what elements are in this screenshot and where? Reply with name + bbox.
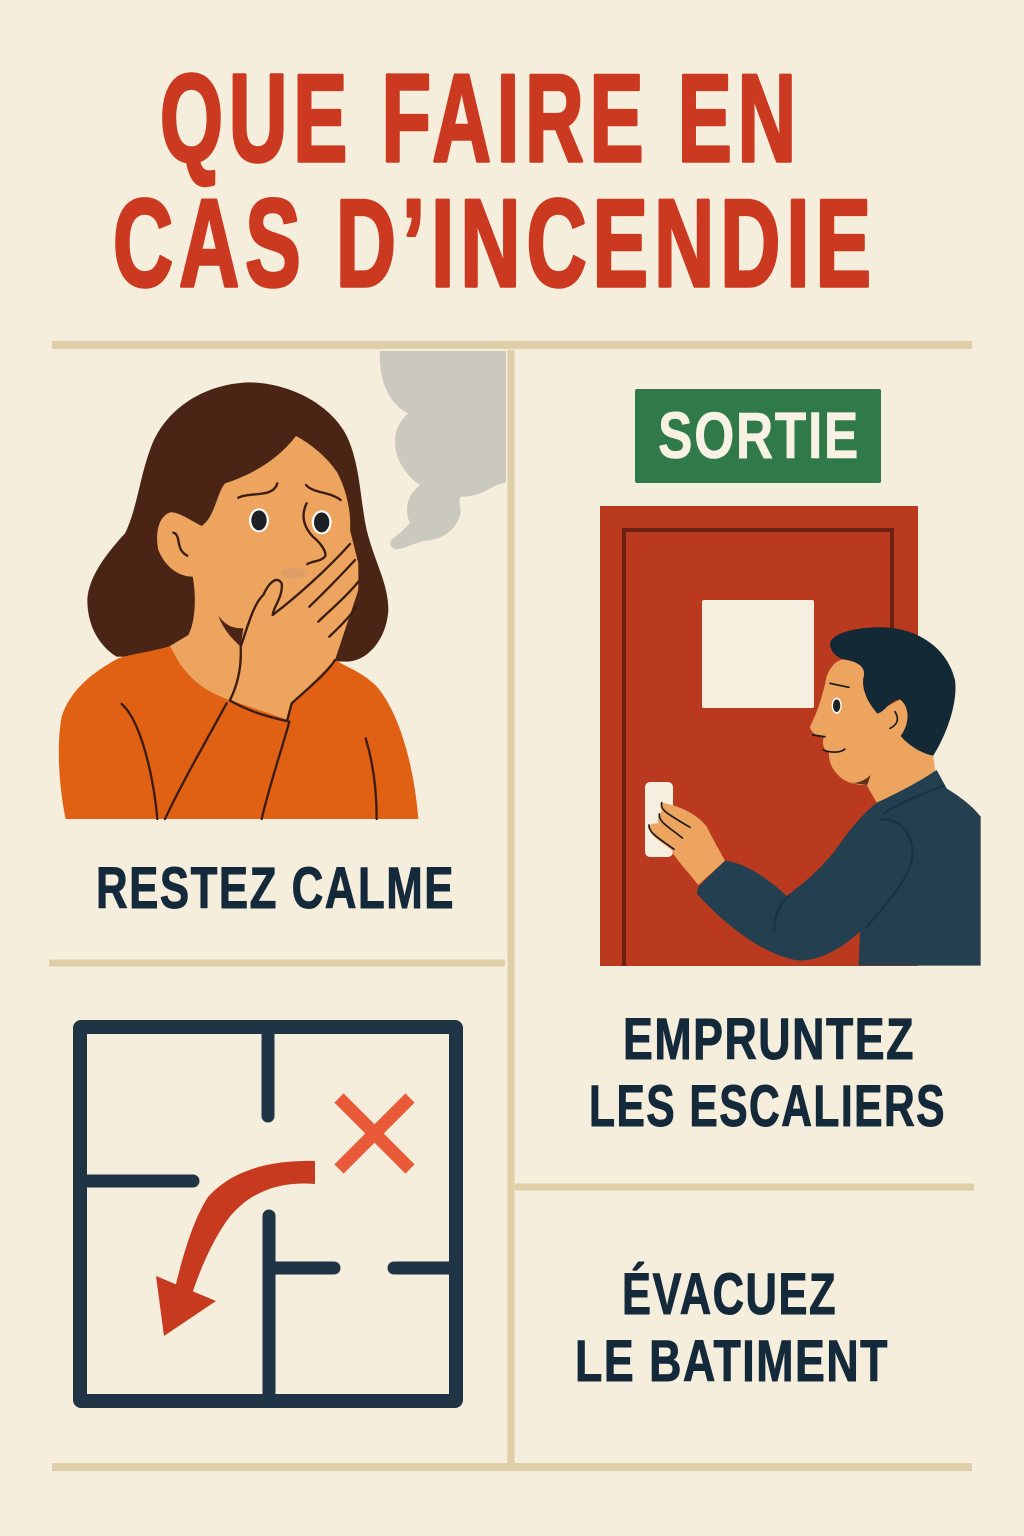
- label: empruntez les escaliers: EMPRUNTEZ: [623, 1007, 915, 1072]
- illustration: woman covering her mouth: [59, 382, 418, 819]
- label: empruntez les escaliers: [589, 1007, 946, 1139]
- exit sign: [635, 389, 881, 483]
- illustration: red door: [600, 506, 918, 966]
- floor plan walls: [80, 1027, 456, 1401]
- illustration: man opening the door: [648, 627, 981, 966]
- icon: smoke cloud: [380, 351, 506, 549]
- icon: red cross: [339, 1098, 410, 1169]
- panel: floor plan: [80, 1027, 456, 1401]
- panel: empruntez les escaliers: [589, 389, 981, 1139]
- panel: évacuez le bâtiment: ÉVACUEZ: [622, 1262, 837, 1327]
- panel: évacuez le bâtiment: LE BATIMENT: [575, 1329, 889, 1394]
- panel: restez calme: [59, 351, 506, 921]
- title: [113, 50, 877, 313]
- label: restez calme: RESTEZ CALME: [96, 856, 455, 921]
- panel: évacuez le bâtiment: [575, 1262, 889, 1394]
- arrow: escape route: [156, 1161, 315, 1336]
- exit sign: SORTIE: [658, 398, 860, 472]
